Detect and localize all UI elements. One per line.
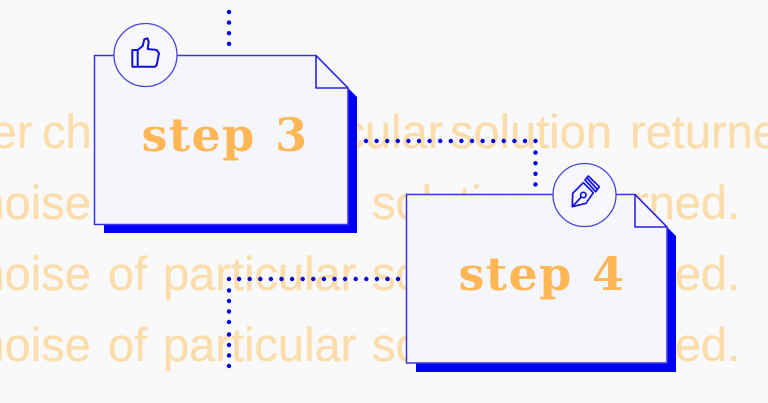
background text lines [0, 105, 768, 371]
card body [406, 194, 667, 363]
background text lines: choise [42, 105, 178, 158]
background text lines: solution [372, 176, 534, 229]
background text lines: of [108, 247, 148, 300]
page fold [635, 194, 667, 227]
page fold [316, 56, 348, 88]
background text lines: solution [450, 105, 612, 158]
card body [94, 56, 348, 224]
background text lines: particular [163, 247, 356, 300]
panel: step 3 card [94, 24, 357, 233]
panel: step 4 card [406, 164, 676, 372]
background text lines: particular [163, 318, 356, 371]
card shadow [104, 88, 357, 233]
heading: step 3: step 3 [142, 108, 308, 162]
background text lines: solution [372, 247, 534, 300]
background text lines: solution [372, 318, 534, 371]
heading: step 4: step 4 [458, 247, 626, 301]
icon: thumbs up [114, 24, 177, 86]
background text lines: returned. [552, 176, 740, 229]
background text lines: particular [250, 105, 443, 158]
dotted connector: top into step 3 [227, 10, 231, 46]
dotted connector: step 4 onward [227, 277, 400, 368]
background text lines: returned. [552, 318, 740, 371]
icon: fountain pen nib [553, 164, 616, 226]
card shadow [416, 227, 676, 372]
background text lines: of [108, 318, 148, 371]
background text lines: returned. [552, 247, 740, 300]
dotted connector: step 3 to step 4 [364, 139, 538, 187]
